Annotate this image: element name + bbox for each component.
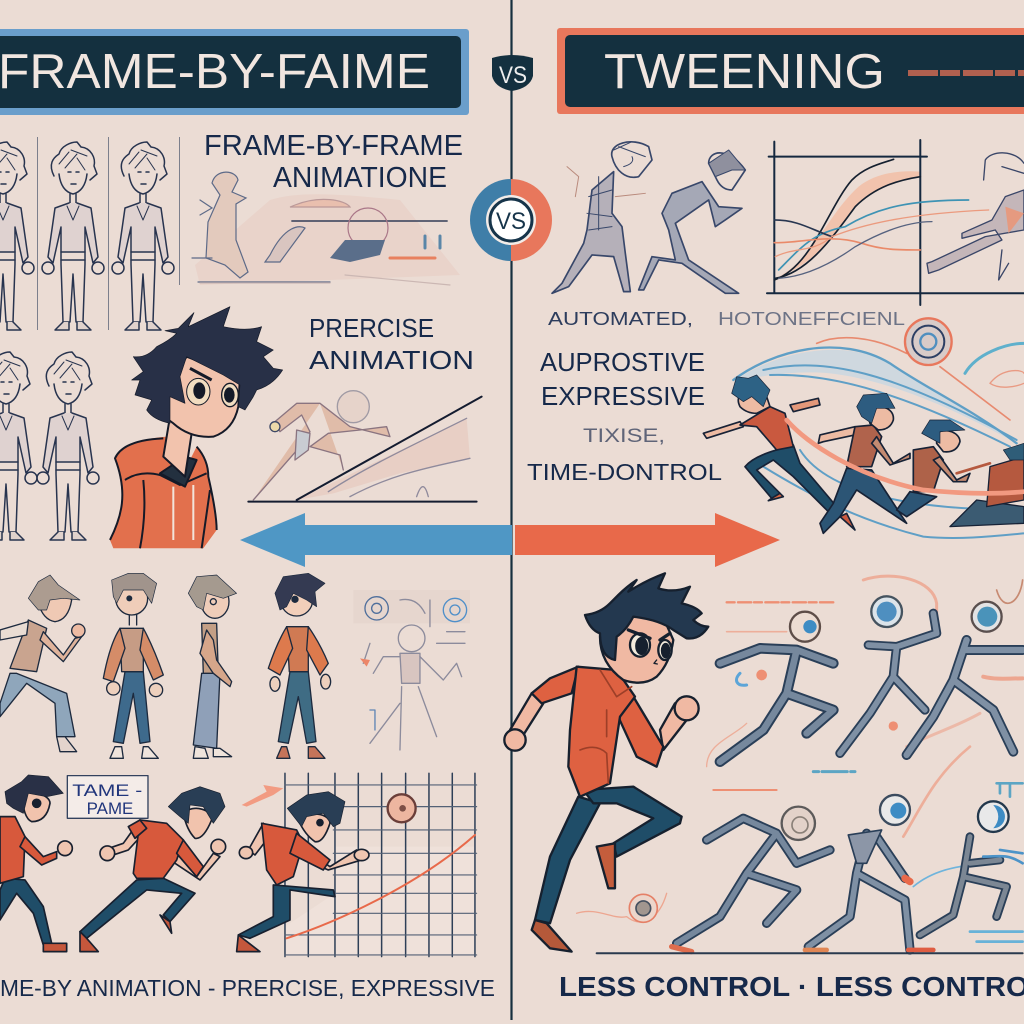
bottom-left caption: ME-BY ANIMATION - PRERCISE, EXPRESSIVE [0, 975, 495, 1001]
sketch: frame-by-frame rough animation [192, 172, 460, 285]
heading: frame-by-frame animation: ANIMATIONE [273, 162, 447, 194]
chart: motion swirl with tween runners [703, 318, 1024, 538]
swirl streaks [733, 338, 1024, 538]
centre divider line [510, 0, 513, 1020]
figure: tween pose one [552, 142, 652, 293]
figure four [268, 573, 331, 758]
heading: precise animation: PRERCISE [309, 313, 434, 343]
top VS shield badge [492, 55, 533, 91]
panel: frame-by-frame standing model sheet [0, 137, 180, 540]
runner four [950, 443, 1024, 527]
heading: precise animation [309, 313, 474, 375]
rig one [720, 612, 833, 762]
right header banner [557, 28, 1024, 114]
heading: expressive time control: TIXISE, [583, 426, 665, 447]
heading: expressive time control [527, 347, 722, 485]
runner one [703, 375, 837, 513]
runner three [897, 420, 970, 517]
label: frame tag: TAME - [72, 781, 142, 800]
sketch: runner on slope [248, 391, 482, 502]
runner three [237, 792, 369, 952]
panel: bottom-right hero and tween rigs [504, 573, 1023, 953]
heading: expressive time control: TIME-DONTROL [527, 459, 722, 485]
heading: frame-by-frame animation: FRAME-BY-FRAME [204, 130, 463, 162]
icon: large character in red hoodie [110, 307, 283, 548]
icon: small target [629, 894, 657, 922]
sketch: pale rig with targets [353, 590, 470, 750]
runner two [818, 393, 910, 533]
centre VS circle badge [470, 179, 552, 261]
floor line [597, 950, 1023, 956]
right header banner: TWEENING [604, 45, 885, 99]
rig six [920, 801, 1023, 935]
figure: tween pose two [639, 150, 745, 293]
rig two [840, 596, 937, 753]
icon: hero runner in red hoodie [504, 573, 708, 952]
runner two [80, 787, 226, 952]
ribbon in front of runners [787, 420, 1024, 493]
figure one [0, 575, 85, 752]
bottom-right caption: LESS CONTROL · LESS CONTRO [559, 971, 1024, 1002]
label: frame tag: PAME [87, 799, 133, 818]
panel: bottom-left running sequence [0, 773, 477, 957]
left header banner [0, 29, 469, 115]
chart: grid with red curve [242, 773, 477, 957]
left header banner: FRAME-BY-FAIME [0, 45, 430, 99]
top VS shield badge: VS [499, 62, 527, 89]
rig five [805, 795, 933, 950]
heading: expressive time control: EXPRESSIVE [541, 381, 705, 411]
panel: tweening key poses and graph [552, 140, 1024, 305]
centre VS circle badge: VS [496, 208, 526, 235]
heading: expressive time control: AUPROSTIVE [540, 347, 705, 377]
label: frame tag [67, 776, 148, 818]
chart: tween easing curves [767, 140, 1024, 305]
figure two [103, 573, 163, 758]
figure three [188, 575, 237, 758]
arrow: blue pointing left [240, 513, 512, 567]
heading: precise animation: ANIMATION [309, 345, 474, 375]
arrow: red pointing right [515, 513, 780, 567]
panel: coloured turnaround figures [0, 573, 331, 758]
rig four [672, 807, 830, 952]
motion trails [577, 576, 1023, 942]
rig three [907, 602, 1023, 755]
text: automated motion efficient [548, 309, 905, 329]
heading: frame-by-frame animation [204, 130, 463, 194]
text: automated motion efficient: AUTOMATED, [548, 309, 693, 329]
runner one [0, 775, 72, 952]
icon: target [905, 318, 952, 365]
figure: tween pose three [927, 153, 1024, 280]
text: automated motion efficient: HOTONEFFCIENL [718, 309, 905, 329]
